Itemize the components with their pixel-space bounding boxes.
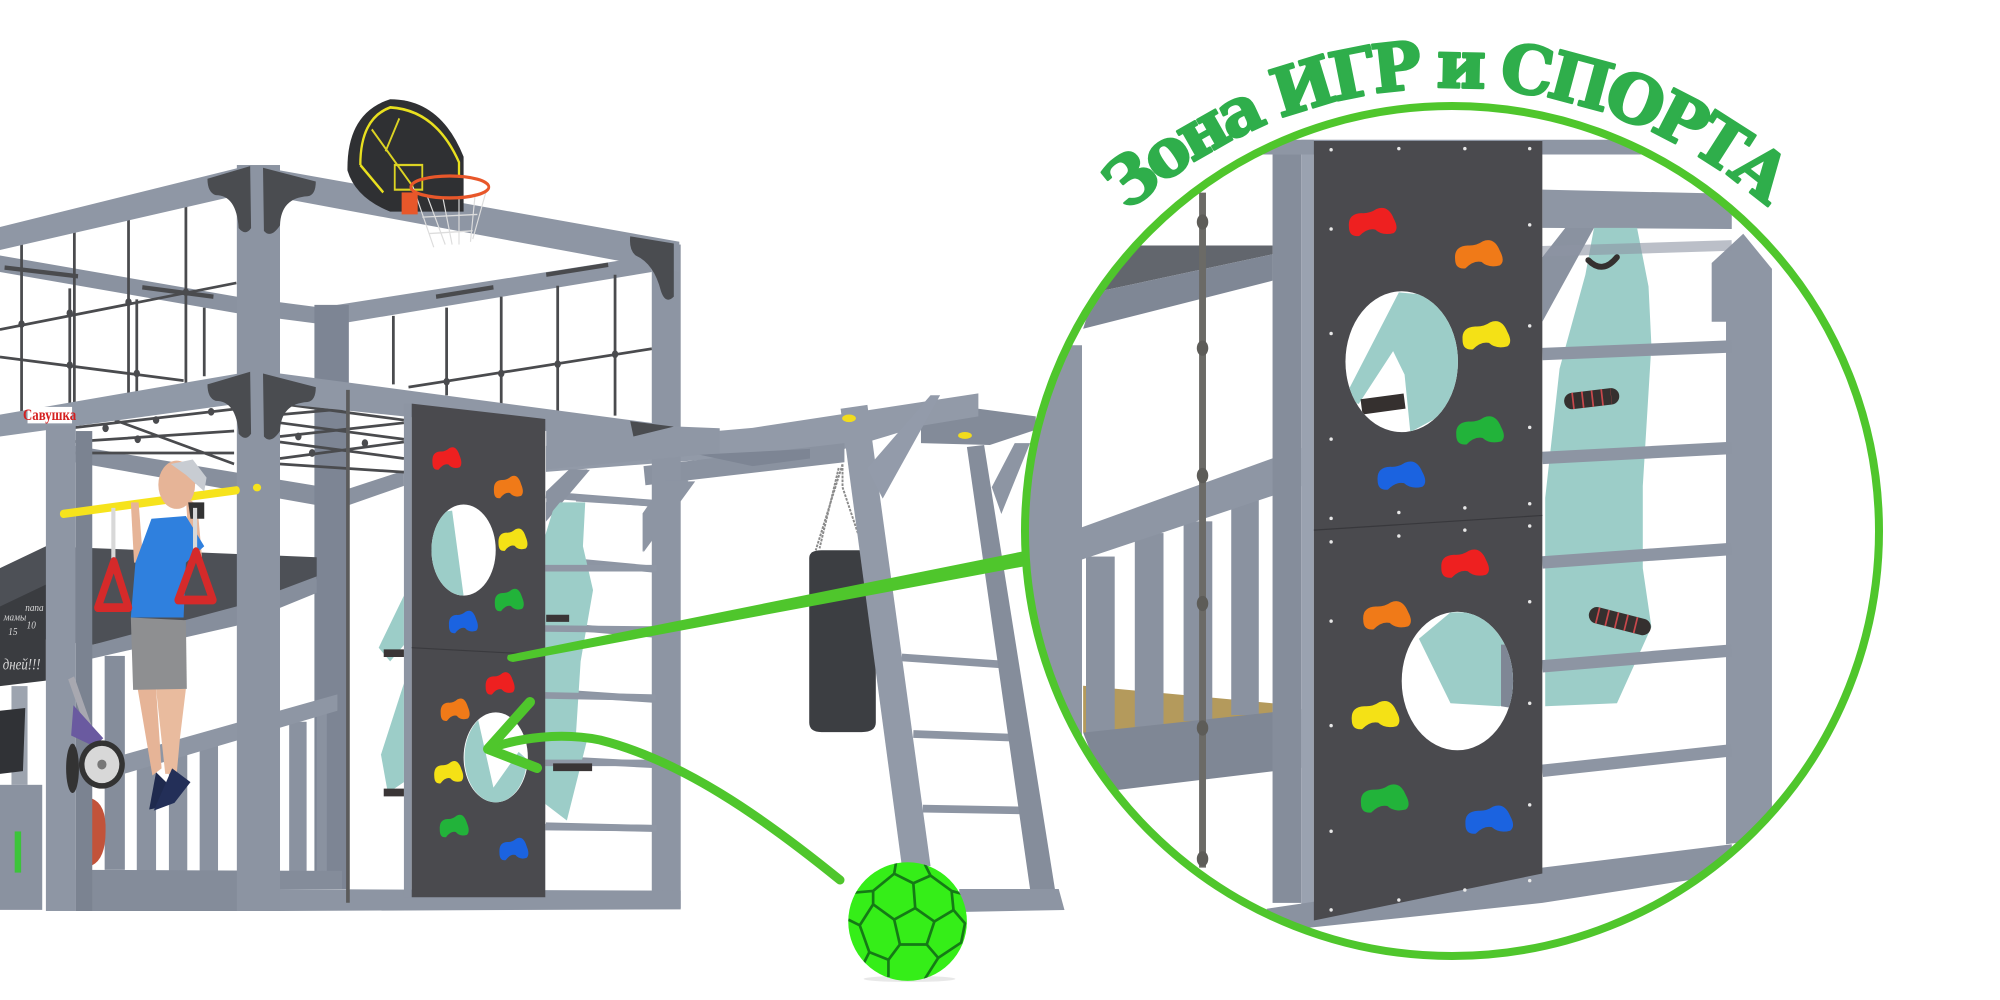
gymnastic rings bbox=[98, 508, 213, 608]
net ropes bbox=[0, 190, 652, 472]
bar end bolt bbox=[253, 484, 261, 491]
curved arrow from ball bbox=[488, 702, 840, 880]
small toy ball bbox=[92, 799, 106, 865]
soccer ball bbox=[848, 862, 967, 982]
net bbox=[413, 187, 487, 247]
fabric swing behind wall bbox=[379, 502, 593, 820]
chalkboard bbox=[0, 585, 46, 686]
overhead beams bbox=[546, 393, 1036, 552]
scooter bbox=[66, 678, 125, 793]
wall bars rungs bbox=[546, 495, 657, 829]
side post and ladder bbox=[1029, 345, 1082, 735]
chalkboard: папа bbox=[25, 602, 44, 614]
pointer line to zoom circle bbox=[507, 551, 1026, 662]
basketball hoop bbox=[347, 99, 489, 247]
backboard bbox=[347, 99, 464, 212]
net knots bbox=[18, 288, 618, 457]
rim bbox=[402, 176, 489, 214]
climbing holds bbox=[432, 447, 528, 860]
punching bag bbox=[809, 464, 876, 732]
main play frame bbox=[0, 165, 720, 911]
roof panel bbox=[0, 546, 317, 870]
circle outline bbox=[1025, 106, 1879, 956]
climbing holds bbox=[1349, 208, 1513, 834]
hand grips bbox=[1572, 257, 1643, 627]
side ladder rungs and post front bbox=[384, 404, 689, 897]
child figure bbox=[131, 460, 207, 811]
front frame posts and beams bbox=[0, 165, 720, 911]
corner brackets bbox=[207, 166, 674, 440]
rivets bbox=[1329, 147, 1531, 912]
climbing wall bbox=[412, 404, 545, 897]
monkey bars, ladder and punching bag bbox=[546, 393, 1064, 912]
zoom circle bbox=[1020, 106, 1879, 956]
magnified wall scene bbox=[1020, 140, 1772, 932]
railing bbox=[1082, 448, 1301, 791]
chalkboard: мамы bbox=[3, 612, 26, 624]
fabric swing bbox=[1545, 228, 1651, 706]
left corner box bbox=[0, 686, 42, 910]
rungs bbox=[1542, 245, 1732, 771]
rear post bbox=[1261, 140, 1669, 920]
climbing wall bbox=[1314, 141, 1542, 921]
chalkboard: дней!!! bbox=[3, 657, 41, 674]
chalkboard: 15 bbox=[8, 626, 17, 638]
chalkboard: 10 bbox=[27, 620, 36, 632]
rope bbox=[1197, 193, 1208, 868]
wall holes bbox=[1344, 291, 1519, 750]
rail and balusters bbox=[76, 694, 681, 911]
pull-up bar bbox=[63, 490, 236, 514]
brand sign: Савушка bbox=[23, 407, 76, 424]
rear beams and post bbox=[0, 245, 681, 908]
A-frame ladder bbox=[841, 395, 1064, 912]
wall bars bbox=[1267, 190, 1772, 932]
wall holes bbox=[431, 505, 528, 804]
title on arc: Зона ИГР и СПОРТА bbox=[1100, 40, 1781, 208]
rope ladder bbox=[344, 390, 352, 903]
roof beam bbox=[1083, 245, 1273, 329]
